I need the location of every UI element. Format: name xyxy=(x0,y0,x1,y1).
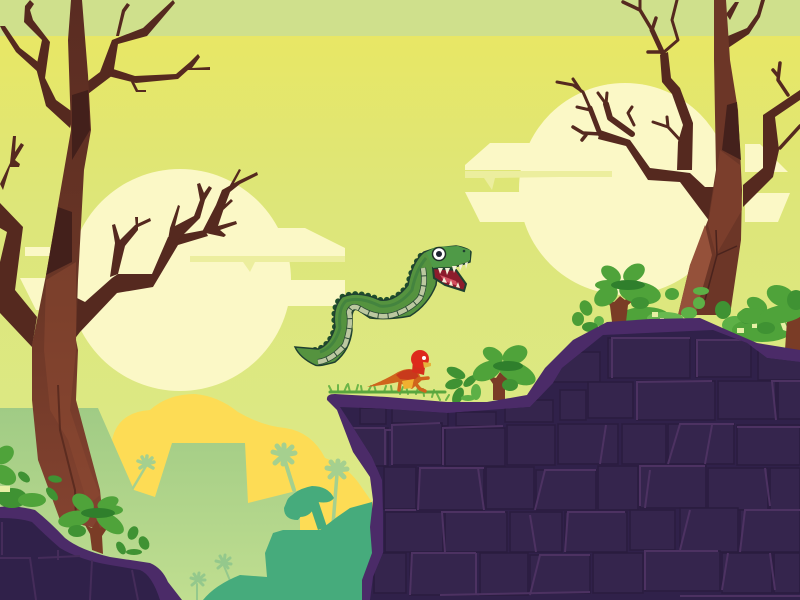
serpent teeth xyxy=(438,262,468,288)
plant: small leafy sprig on ledge xyxy=(444,364,481,406)
serpent nostril xyxy=(463,250,465,252)
plant: leafy shrub on left rock xyxy=(0,442,63,508)
right tree branches xyxy=(557,0,800,222)
top sky band xyxy=(0,0,800,36)
serpent belly highlights xyxy=(318,268,424,362)
plant stem xyxy=(607,294,634,322)
dinosaur eye xyxy=(422,356,426,360)
right tree twigs xyxy=(557,0,800,148)
dinosaur head xyxy=(411,350,429,368)
cliff outer rim xyxy=(327,318,800,600)
green flying serpent dinosaur xyxy=(295,246,471,366)
left edge leaves xyxy=(0,442,63,508)
distant green mountains xyxy=(0,408,300,600)
plant leaves xyxy=(57,490,128,539)
serpent head top xyxy=(426,246,470,268)
serpent outline xyxy=(295,246,471,366)
dinosaur neck xyxy=(412,360,426,375)
pale leaf flecks xyxy=(643,312,789,333)
main purple rock cliff xyxy=(327,318,800,600)
right trunk highlights xyxy=(708,150,742,255)
plant stem xyxy=(487,372,512,400)
cliff inner dark wall xyxy=(340,330,800,600)
yellow haze behind hills xyxy=(110,394,374,560)
pale flecks xyxy=(0,486,10,492)
right sun xyxy=(519,83,731,295)
thick right branches xyxy=(598,0,800,222)
brick highlights xyxy=(352,338,800,596)
left tree trunk xyxy=(32,0,104,530)
left sun xyxy=(69,169,291,391)
plant: tree at far right xyxy=(737,281,800,350)
cliff bricks xyxy=(352,338,800,596)
shrub leaves xyxy=(572,287,792,342)
serpent tongue xyxy=(440,275,458,286)
palm xyxy=(216,555,231,583)
palm xyxy=(327,461,347,525)
right trunk lower left light xyxy=(678,225,712,315)
left tree xyxy=(0,0,258,530)
dinosaur tail and body xyxy=(367,369,422,389)
brick blocks xyxy=(352,338,800,595)
plant leaves xyxy=(470,341,539,391)
plant stem xyxy=(778,310,800,350)
plant leaves xyxy=(590,260,663,311)
serpent belly plates xyxy=(318,268,424,362)
left trunk shading xyxy=(46,90,90,275)
dinosaur snout xyxy=(423,362,431,368)
distant palms xyxy=(133,445,347,600)
left trunk highlights xyxy=(44,262,100,505)
serpent back scales xyxy=(315,252,424,350)
serpent eye xyxy=(432,248,446,260)
teal canopy tree xyxy=(284,486,334,530)
right trunk shading xyxy=(722,102,741,160)
left bottom rock xyxy=(0,506,182,600)
dinosaur belly xyxy=(402,379,414,389)
serpent lower jaw and mouth xyxy=(433,268,466,291)
left rock outer rim xyxy=(0,506,182,600)
palm xyxy=(191,573,205,600)
shrubs behind right rock xyxy=(572,287,792,342)
plant: tree on left rock xyxy=(57,490,128,554)
serpent dark back stripe xyxy=(320,258,426,352)
left tree branches xyxy=(0,0,258,347)
right clouds xyxy=(465,143,790,222)
plant leaves xyxy=(737,281,800,334)
plant stem xyxy=(85,520,110,554)
palm xyxy=(133,456,154,488)
left clouds xyxy=(20,228,345,310)
foreground teal jungle silhouette xyxy=(203,502,374,600)
plant: small sprig on left rock xyxy=(114,525,151,556)
palm xyxy=(273,445,295,490)
dinosaur legs xyxy=(399,378,428,391)
dinosaur back markings xyxy=(396,370,419,380)
right trunk crack xyxy=(705,230,737,300)
left rock inner wall xyxy=(0,518,160,600)
right tree xyxy=(557,0,800,315)
grass tufts on ledge xyxy=(329,384,449,400)
small red dinosaur xyxy=(367,350,431,391)
plant: tree on middle ledge xyxy=(470,341,539,400)
right tree trunk xyxy=(678,0,742,315)
left trunk crack xyxy=(58,385,76,520)
plant: tree on right ledge xyxy=(590,260,663,322)
left rock brick highlights xyxy=(0,522,138,600)
